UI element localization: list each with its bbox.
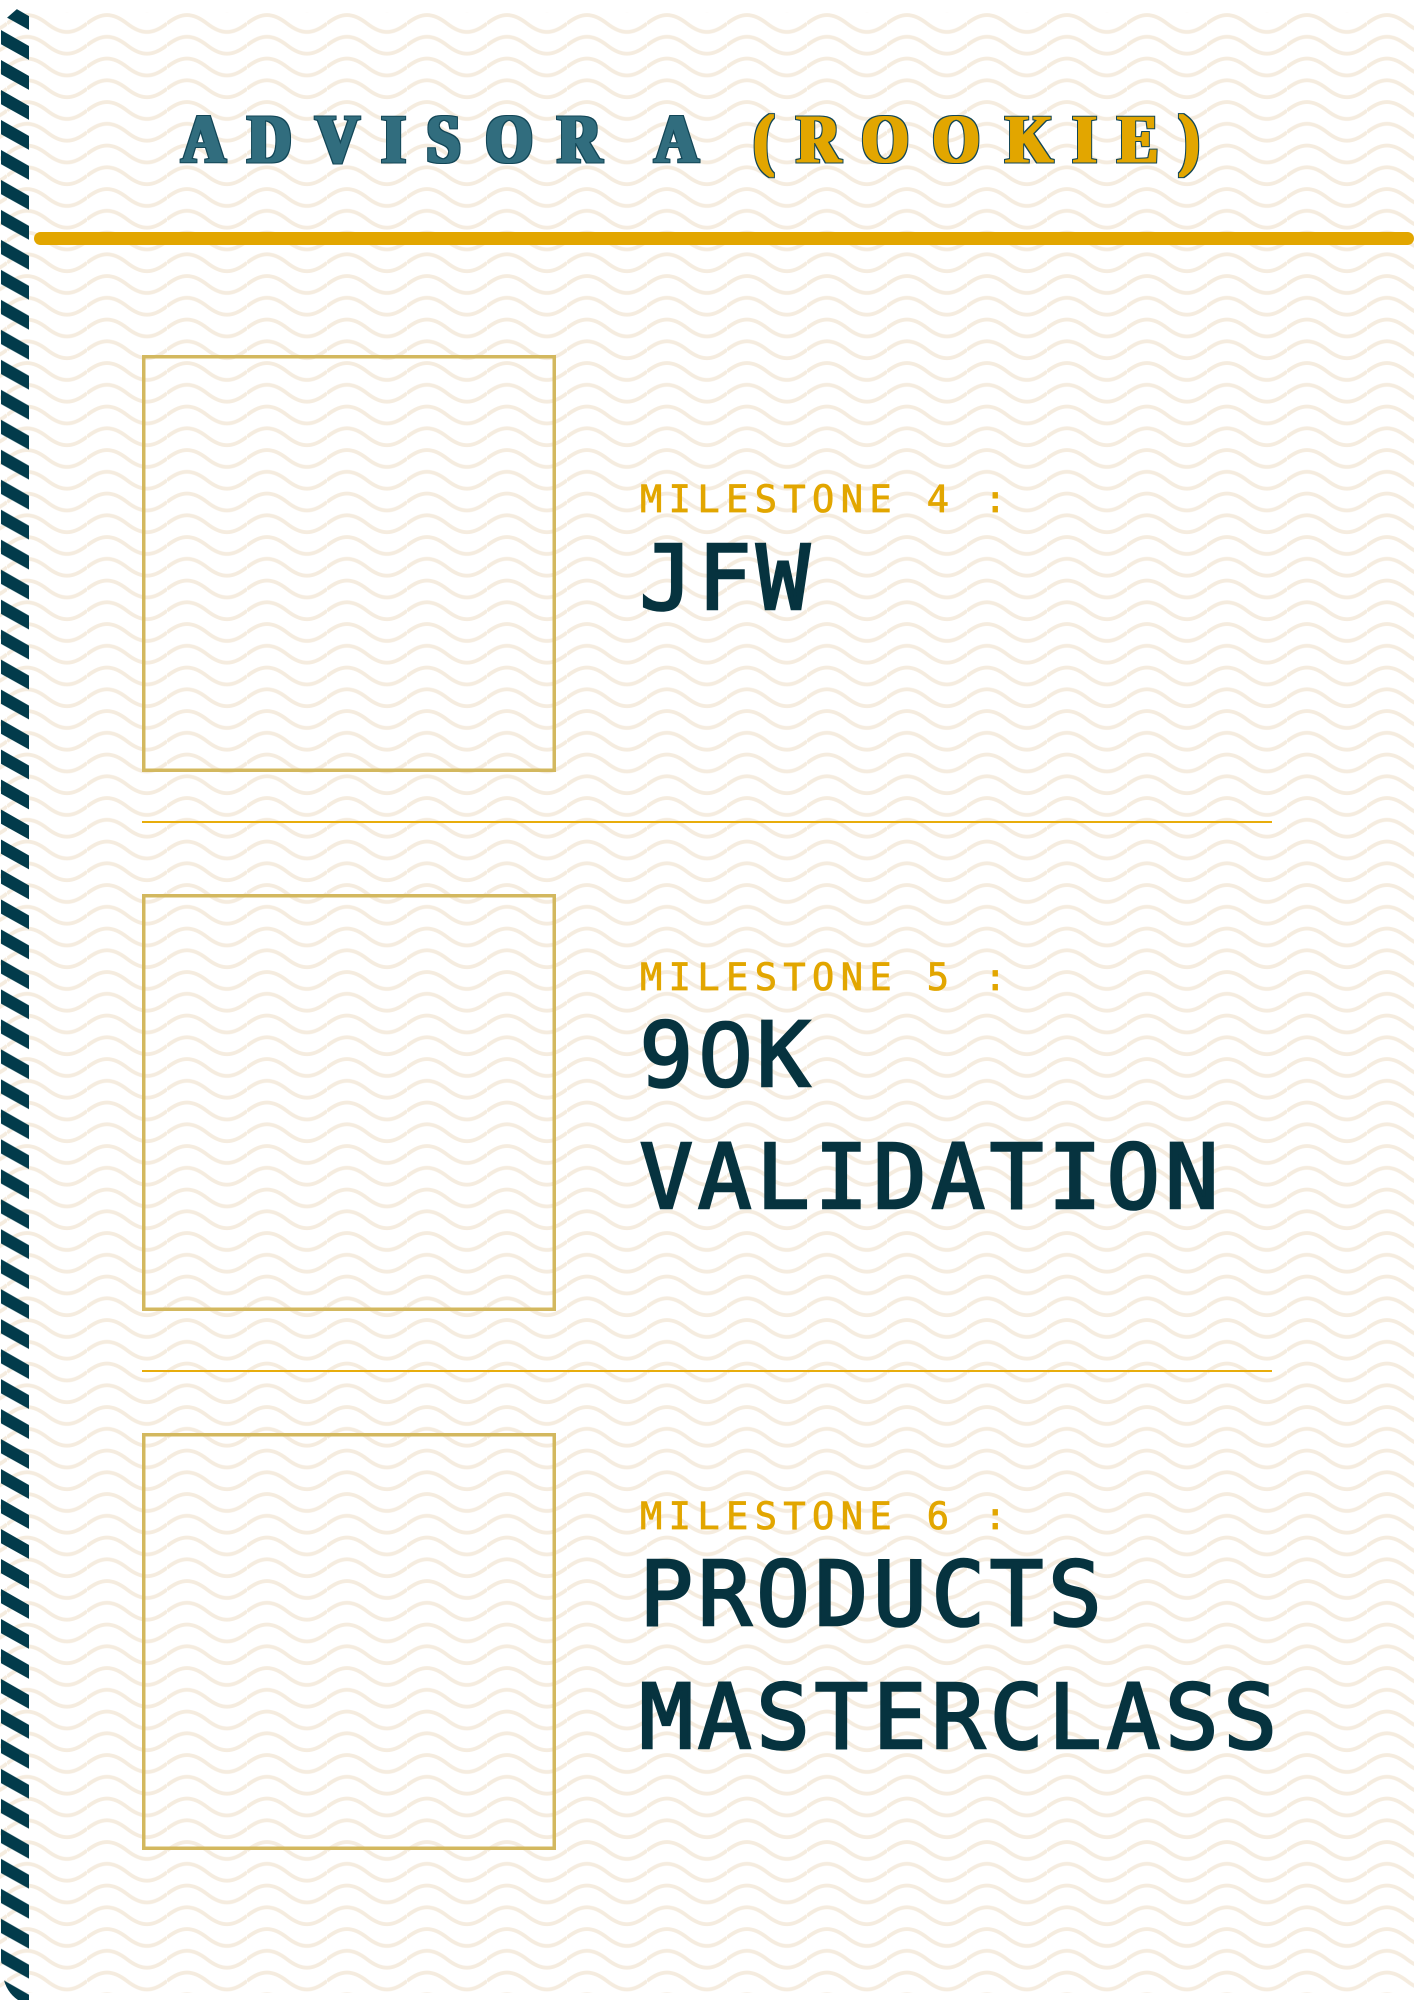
image frame: milestone 4 — [144, 357, 554, 770]
heading: 90K validation — [640, 1003, 1223, 1229]
panel: milestone 6 — [144, 1435, 1282, 1848]
header rule — [34, 232, 1414, 245]
heading: JFW: JFW — [640, 526, 815, 630]
heading: 90K validation: 0 — [700, 1004, 756, 1106]
spiral binding stripes — [0, 0, 30, 2000]
panel: milestone 5 — [144, 896, 1223, 1309]
heading: products masterclass — [640, 1542, 1282, 1769]
heading: 90K validation: 9 — [640, 1003, 698, 1107]
title: ADVISOR A — [182, 101, 698, 179]
label: milestone 5: MILESTONE 5 : — [640, 956, 1013, 999]
heading: 90K validation: K — [756, 1003, 815, 1107]
title — [182, 101, 1199, 179]
heading: products masterclass: PRODUCTS — [640, 1542, 1107, 1646]
image frame: milestone 6 — [144, 1435, 554, 1848]
label: milestone 4: MILESTONE 4 : — [640, 478, 1013, 521]
title: (ROOKIE) — [754, 101, 1199, 179]
label: milestone 6: MILESTONE 6 : — [640, 1495, 1013, 1538]
image frame: milestone 5 — [144, 896, 554, 1309]
heading: 90K validation: VALIDATION — [640, 1125, 1223, 1229]
panel: milestone 4 — [144, 357, 1013, 770]
heading: products masterclass: MASTERCLASS — [640, 1665, 1282, 1769]
